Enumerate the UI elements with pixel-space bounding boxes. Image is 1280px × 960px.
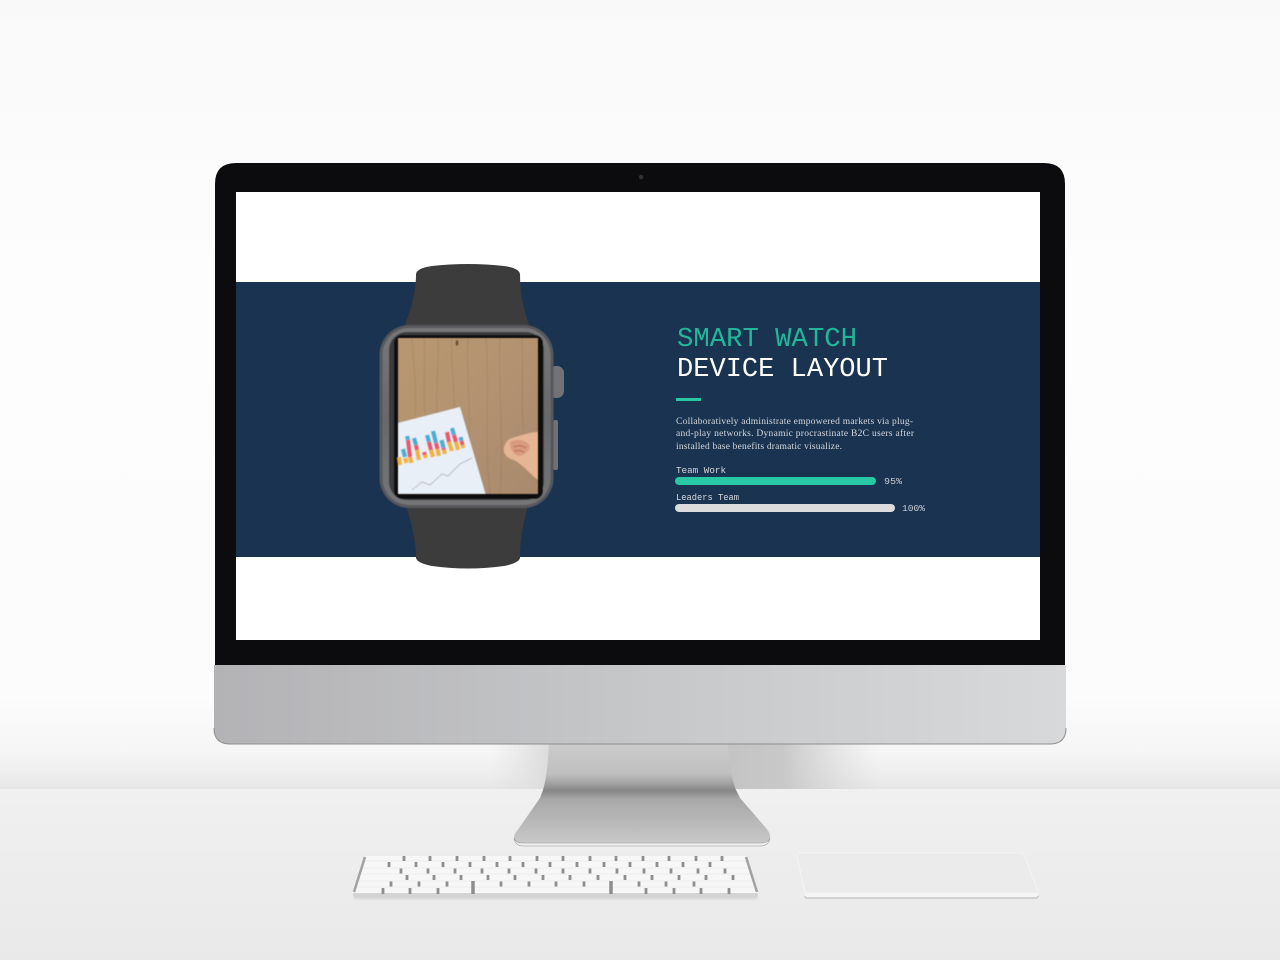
paper xyxy=(398,407,486,494)
monitor bezel xyxy=(215,163,1065,665)
line graph xyxy=(412,458,472,490)
side button xyxy=(553,420,558,470)
keyboard shadow xyxy=(354,896,758,900)
bar xyxy=(675,477,876,485)
knot xyxy=(456,340,458,346)
key gaps xyxy=(383,856,733,894)
watch crown xyxy=(549,366,564,398)
value: 95% xyxy=(884,477,903,487)
body text: Collaboratively administrate empowered markets via plug- xyxy=(676,417,913,427)
fist xyxy=(504,432,538,480)
watch screen image xyxy=(398,338,538,494)
monitor stand xyxy=(514,744,770,846)
body text: installed base benefits dramatic visualize. xyxy=(676,441,842,452)
title line 2: DEVICE LAYOUT xyxy=(677,355,888,385)
keyboard side edges xyxy=(354,857,365,892)
keyboard xyxy=(353,856,758,900)
screen xyxy=(236,192,1040,640)
label: Leaders Team xyxy=(676,493,739,503)
wood table xyxy=(398,338,538,494)
smart watch xyxy=(380,264,564,568)
watch band bottom xyxy=(404,500,530,568)
title xyxy=(677,325,888,385)
key row lines xyxy=(356,861,756,887)
bar xyxy=(675,504,895,512)
watch band top xyxy=(402,264,532,332)
accent rule xyxy=(676,398,701,401)
navy band xyxy=(236,282,1040,557)
progress: team work xyxy=(675,466,903,487)
progress: leaders team xyxy=(675,493,926,514)
trackpad surface xyxy=(797,853,1038,893)
camera xyxy=(639,175,643,179)
keyboard body xyxy=(353,856,758,898)
background: desk xyxy=(0,789,1280,960)
title line 1: SMART WATCH xyxy=(677,325,857,355)
stand body xyxy=(514,744,770,843)
body text xyxy=(676,417,915,452)
value: 100% xyxy=(902,504,926,514)
trackpad xyxy=(797,853,1038,898)
keyboard front edge xyxy=(353,893,758,898)
body text: and-play networks. Dynamic procrastinate B2C users after xyxy=(676,428,915,439)
stand foot lip xyxy=(514,838,770,846)
monitor chin xyxy=(214,665,1066,744)
chart bars xyxy=(399,428,464,465)
label: Team Work xyxy=(676,466,726,476)
monitor xyxy=(214,163,1066,744)
trackpad edge xyxy=(805,893,1038,898)
stand shadow on wall xyxy=(490,744,880,790)
watch case xyxy=(380,325,554,508)
